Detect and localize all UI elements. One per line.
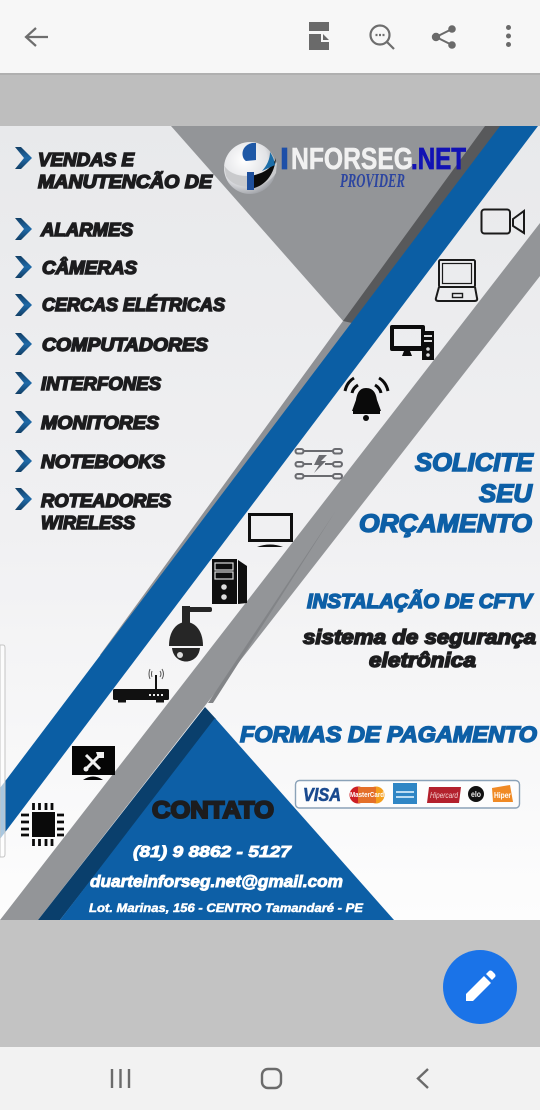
mastercard	[350, 786, 384, 804]
floating edit button	[443, 950, 517, 1024]
blue diagonal band	[0, 126, 538, 839]
phone: (81) 9 8862 - 5127	[133, 844, 292, 861]
callout: solicite seu orcamento: ORÇAMENTO	[359, 510, 533, 538]
grey header triangle	[171, 126, 487, 322]
mastercard: MasterCard	[350, 792, 384, 799]
icon: wifi router	[113, 669, 169, 702]
heading: instalacao de cftv: INSTALAÇÃO DE CFTV	[307, 590, 534, 613]
list item: roteadores wireless: ROTEADORES	[41, 491, 171, 511]
icon: back	[418, 1069, 428, 1088]
icon: computer tower	[212, 559, 247, 604]
list item: alarmes: ALARMES	[40, 220, 133, 240]
icon: microchip	[21, 803, 64, 846]
icon: alarm bell	[345, 378, 388, 421]
list item: cercas eletricas: CERCAS ELÉTRICAS	[42, 294, 225, 315]
blue contact triangle	[60, 718, 394, 920]
list item: computadores: COMPUTADORES	[42, 335, 208, 355]
list item: roteadores wireless: WIRELESS	[41, 513, 135, 533]
app top bar	[0, 0, 540, 75]
list item: monitores: MONITORES	[41, 413, 159, 433]
heading: vendas e manutencao: MANUTENCÃO DE	[38, 171, 213, 192]
american express	[393, 783, 417, 804]
icon: share	[432, 25, 456, 49]
dark blue stripe	[38, 707, 216, 920]
logo provider: PROVIDER	[339, 170, 405, 192]
icon: tv with tools	[72, 746, 115, 780]
icon: document	[309, 22, 329, 50]
icon: more menu	[506, 25, 511, 47]
logo sphere	[224, 142, 277, 194]
bottom navigation bar	[0, 1047, 540, 1110]
callout: solicite seu orcamento	[359, 449, 534, 538]
viewer top margin	[0, 73, 540, 126]
icon: back arrow	[26, 28, 48, 46]
list item: notebooks: NOTEBOOKS	[41, 452, 165, 472]
elo: elo	[471, 790, 481, 799]
text: sistema de seguranca	[303, 627, 536, 672]
icon: laptop	[436, 260, 477, 301]
text: sistema de seguranca: eletrônica	[369, 650, 476, 672]
list item: interfones: INTERFONES	[41, 374, 161, 394]
hipercard: Hipercard	[430, 791, 458, 800]
contact heading: CONTATO	[152, 797, 274, 824]
icon: pencil	[466, 970, 496, 1001]
logo wordmark: NFORSEG	[291, 141, 413, 176]
thin grey diagonal stripe	[100, 321, 352, 655]
icon: recent apps	[112, 1069, 129, 1088]
icon: monitor	[248, 513, 293, 547]
elo	[468, 786, 484, 802]
list item: cameras: CÂMERAS	[42, 257, 137, 278]
icon: search	[370, 26, 394, 49]
icon: electric fence	[296, 449, 342, 478]
logo wordmark: I	[280, 141, 289, 176]
callout: solicite seu orcamento: SEU	[479, 480, 533, 508]
icon: home	[262, 1069, 281, 1088]
hiper: Hiper	[494, 791, 511, 800]
grey diagonal band	[0, 223, 540, 920]
hiper	[492, 785, 513, 802]
hipercard	[427, 787, 461, 803]
edge side panel	[0, 645, 5, 857]
payment card strip	[296, 780, 520, 808]
logo	[224, 141, 466, 194]
services list	[15, 147, 225, 533]
heading: formas de pagamento: FORMAS DE PAGAMENTO	[240, 722, 537, 747]
contact block	[89, 797, 364, 915]
list item: cameras	[15, 256, 137, 278]
email: duarteinforseg.net@gmail.com	[90, 872, 343, 891]
darker edge of grey band	[208, 512, 335, 703]
visa: VISA	[303, 785, 341, 805]
list item: roteadores wireless	[15, 488, 171, 533]
poster	[0, 126, 540, 920]
callout: solicite seu orcamento: SOLICITE	[415, 449, 534, 477]
list item: monitores	[15, 411, 159, 433]
heading: vendas e manutencao: VENDAS E	[38, 150, 135, 170]
poster background	[0, 126, 540, 920]
logo wordmark: .NET	[411, 141, 466, 176]
dark diagonal stripe	[343, 126, 501, 324]
icon: video camera	[482, 210, 524, 234]
address: Lot. Marinas, 156 - CENTRO Tamandaré - PE	[89, 901, 364, 915]
heading: vendas e manutencao	[15, 147, 213, 192]
text: sistema de seguranca: sistema de segurança	[303, 627, 536, 649]
icon: desktop computer	[390, 325, 434, 360]
list item: alarmes	[15, 218, 133, 240]
icon: dome camera	[169, 606, 212, 662]
